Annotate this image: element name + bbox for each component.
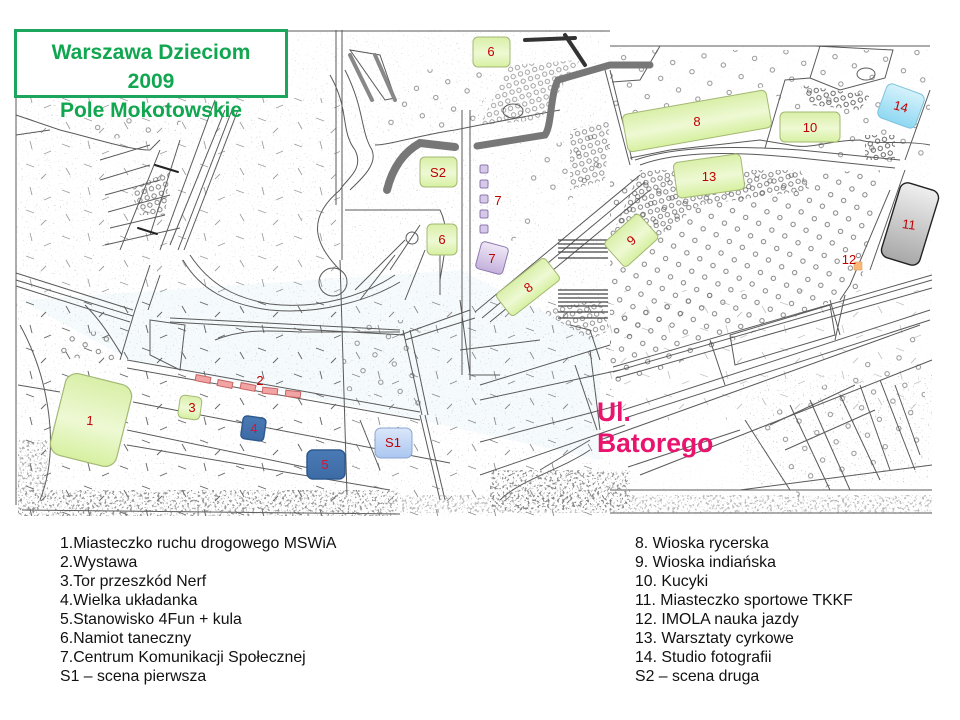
zone 10 <box>780 112 840 142</box>
title box <box>14 29 288 98</box>
zone S2: S2 <box>430 165 446 180</box>
legend left: S1 – scena pierwsza <box>60 668 206 685</box>
legend left: 4.Wielka układanka <box>60 592 197 609</box>
legend right: 8. Wioska rycerska <box>635 535 769 552</box>
legend right: 11. Miasteczko sportowe TKKF <box>635 592 853 609</box>
zone S2 <box>420 157 457 187</box>
map: dense bottom edge <box>18 375 932 516</box>
zone 8 lower <box>495 257 561 317</box>
legend right: S2 – scena druga <box>635 668 759 685</box>
zone 5 <box>307 450 345 479</box>
zone 8 upper <box>622 90 772 152</box>
map: road network <box>16 30 932 514</box>
zone 11: 11 <box>901 216 917 233</box>
zone 13: 13 <box>702 169 716 184</box>
zone 4: 4 <box>250 421 258 436</box>
zone 6 lower: 6 <box>438 232 446 247</box>
zone 8 upper: 8 <box>693 114 701 129</box>
zone 7 tent <box>475 241 509 275</box>
map: paper speckle <box>16 30 932 516</box>
legend right: 13. Warsztaty cyrkowe <box>635 630 794 647</box>
legend right: 9. Wioska indiańska <box>635 554 776 571</box>
zone 13 <box>673 153 745 199</box>
zone 7 stands: 7 <box>494 193 502 208</box>
zone 10: 10 <box>803 120 817 135</box>
map: white right-side margin <box>16 30 960 522</box>
legend right: 10. Kucyki <box>635 573 708 590</box>
zone 7 stands <box>480 165 502 233</box>
zone 12 <box>842 252 862 270</box>
zone 1: 1 <box>86 413 94 428</box>
zone 9 <box>603 213 659 268</box>
map: tree clusters <box>60 50 930 500</box>
zone 2 dashes <box>195 373 301 398</box>
street label: Ul. <box>597 397 631 427</box>
zone 8 lower: 8 <box>521 279 536 296</box>
legend right: 12. IMOLA nauka jazdy <box>635 611 799 628</box>
legend left <box>60 535 336 685</box>
zone 7 tent: 7 <box>488 251 496 266</box>
legend left: 5.Stanowisko 4Fun + kula <box>60 611 242 628</box>
street label <box>597 397 713 458</box>
zone 11 <box>879 181 941 267</box>
map: legend text block on plan <box>558 240 608 318</box>
legend left: 1.Miasteczko ruchu drogowego MSWiA <box>60 535 336 552</box>
zone 14 <box>876 82 926 130</box>
zone 1 <box>48 371 134 469</box>
title text: 2009 <box>128 70 174 93</box>
title text <box>52 41 250 122</box>
title text: Pole Mokotowskie <box>60 99 242 122</box>
map: pale tint <box>20 270 600 460</box>
zone 6 lower <box>427 224 457 255</box>
legend left: 6.Namiot taneczny <box>60 630 191 647</box>
zone 3: 3 <box>188 400 196 415</box>
zone 3 <box>177 395 202 420</box>
street label: Batorego <box>597 428 713 458</box>
map: scribbled ground marks <box>16 98 932 516</box>
legend left: 2.Wystawa <box>60 554 137 571</box>
zone S1: S1 <box>385 435 401 450</box>
map: textured paved paths <box>138 35 650 234</box>
zone 5: 5 <box>321 457 329 472</box>
zone 4 <box>240 415 266 441</box>
legend right: 14. Studio fotografii <box>635 649 772 666</box>
zone 2 dashes: 2 <box>256 373 264 388</box>
zone 6 upper: 6 <box>487 44 495 59</box>
legend right <box>635 535 853 685</box>
zone S1 <box>375 428 412 458</box>
legend left: 3.Tor przeszkód Nerf <box>60 573 206 590</box>
legend left: 7.Centrum Komunikacji Społecznej <box>60 649 306 666</box>
title text: Warszawa Dzieciom <box>52 41 250 64</box>
zone 14: 14 <box>892 97 910 116</box>
zone 12: 12 <box>842 252 856 267</box>
zone 9: 9 <box>624 232 639 248</box>
zone 6 upper <box>473 37 510 67</box>
